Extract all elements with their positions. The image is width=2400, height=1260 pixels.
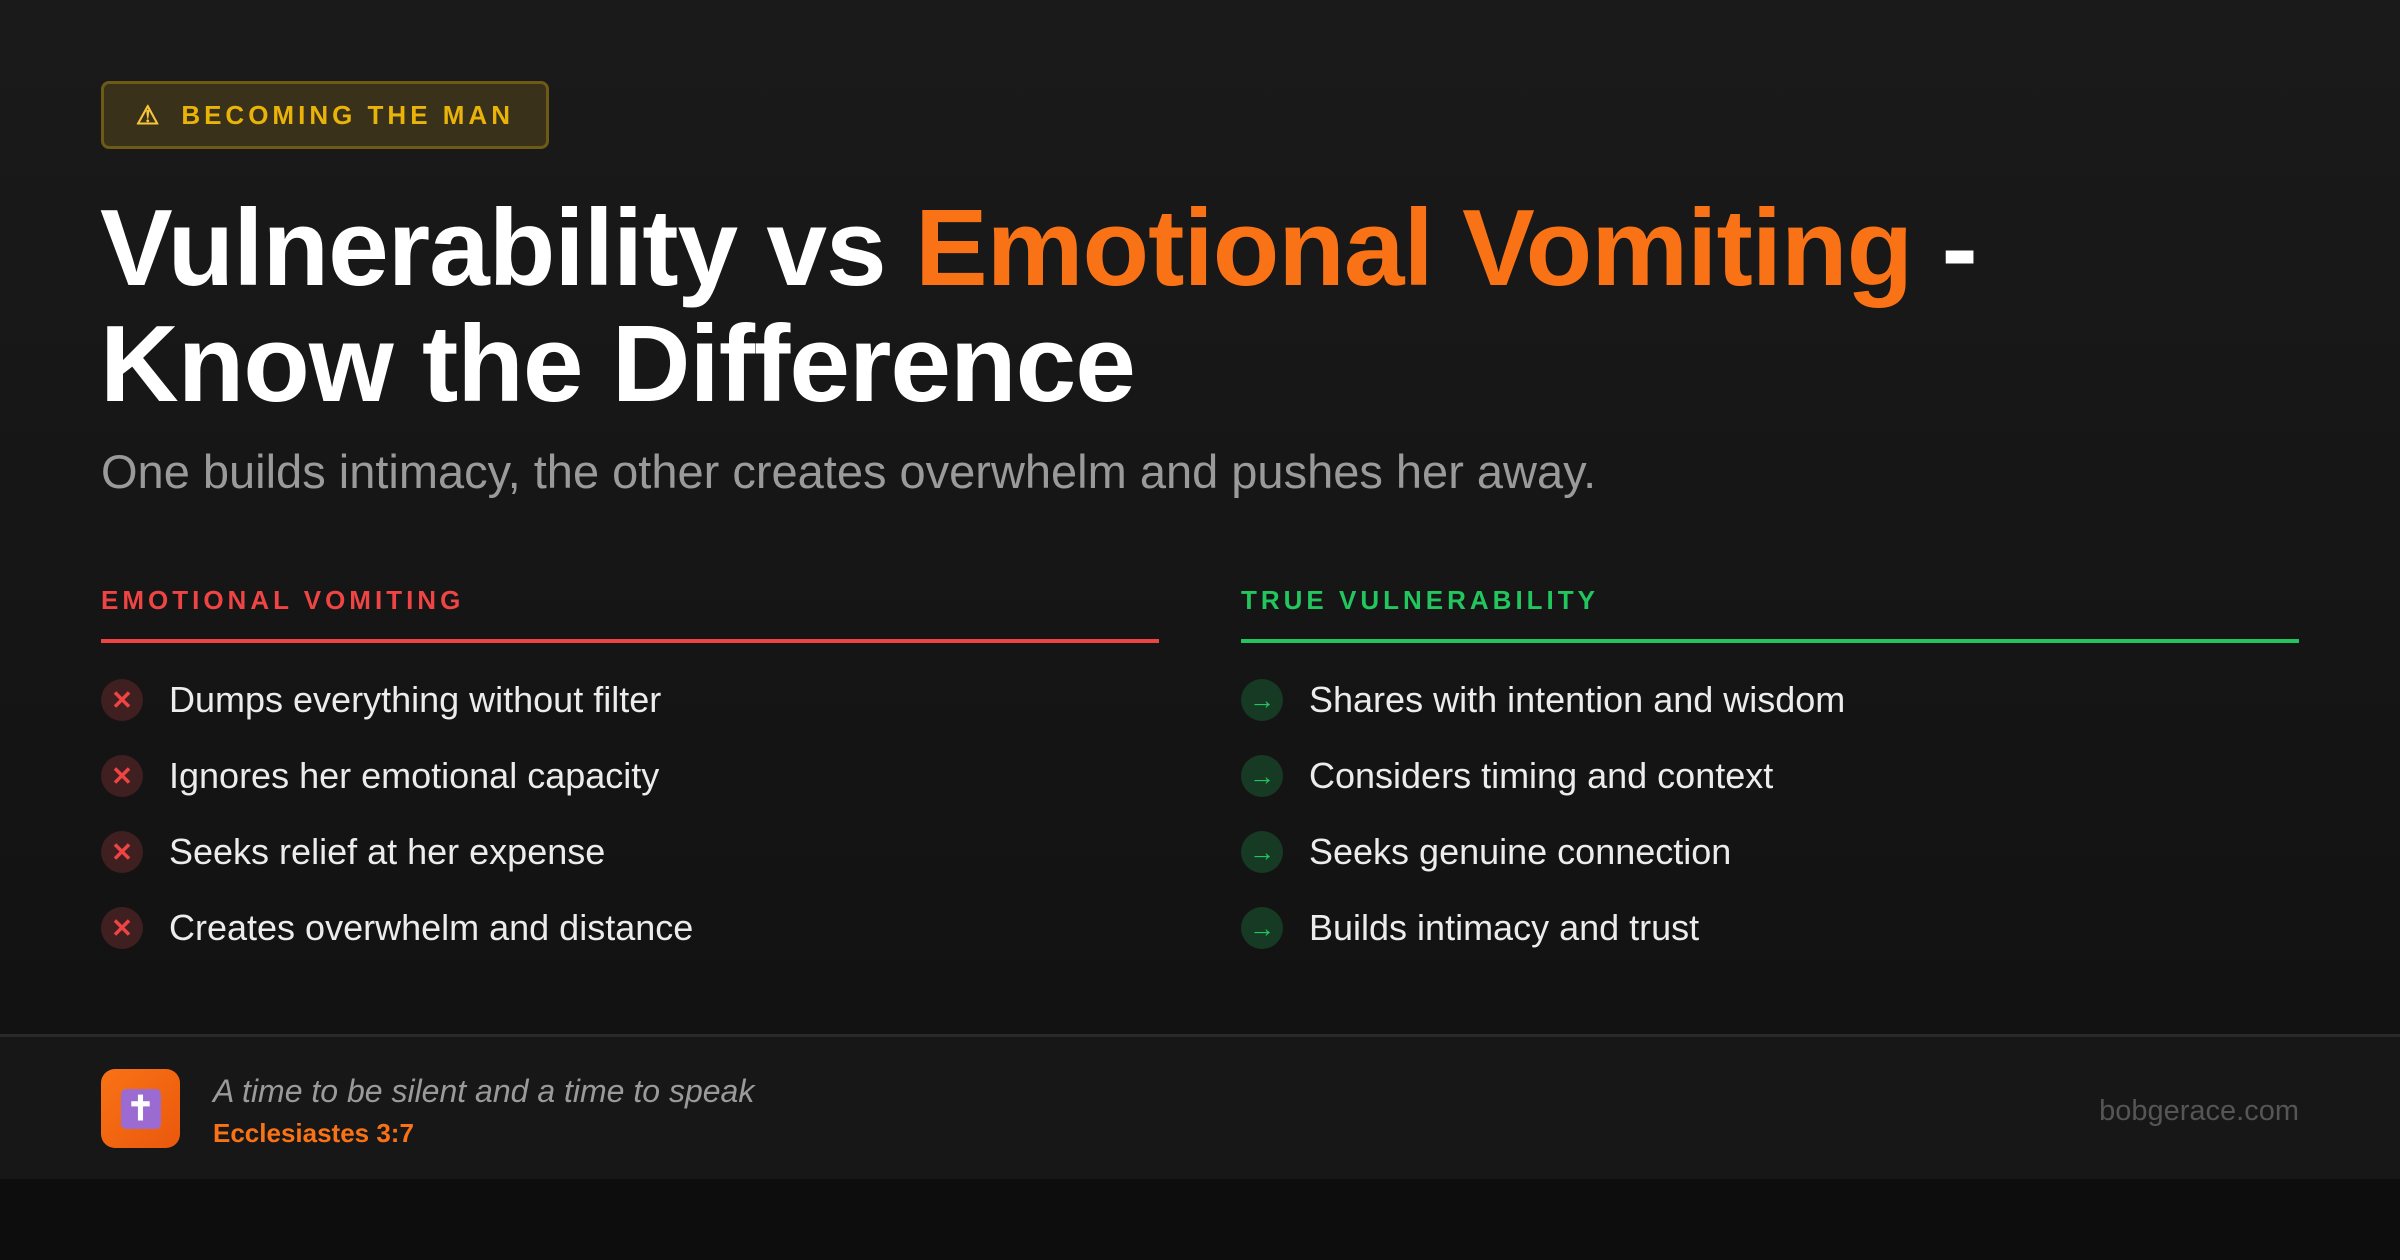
title: Know the Difference (100, 303, 1135, 425)
list: emotional vomiting items: ✕ (111, 761, 133, 791)
badge: becoming the man: ⚠ (136, 100, 163, 130)
icon: cross (101, 1069, 180, 1148)
list: emotional vomiting items: Seeks relief at her expense (169, 831, 605, 872)
header: true vulnerability: TRUE VULNERABILITY (1241, 585, 1599, 615)
list: emotional vomiting items: ✕ (111, 685, 133, 715)
badge: becoming the man: BECOMING THE MAN (181, 100, 514, 130)
quote: A time to be silent and a time to speak (213, 1073, 754, 1109)
reference: Ecclesiastes 3:7 (213, 1118, 414, 1148)
footer (0, 1034, 2400, 1179)
list: true vulnerability items: Builds intimacy and trust (1309, 907, 1699, 948)
list: true vulnerability items (1241, 679, 1845, 949)
list: true vulnerability items: → (1249, 837, 1275, 867)
website: bobgerace.com (2099, 1095, 2299, 1127)
list: emotional vomiting items: Creates overwhelm and distance (169, 907, 693, 948)
list: true vulnerability items: Seeks genuine connection (1309, 831, 1731, 872)
title (100, 187, 1977, 425)
panel: true vulnerability (1241, 585, 2299, 949)
list: emotional vomiting items: Dumps everything without filter (169, 679, 661, 720)
list: emotional vomiting items: ✕ (111, 913, 133, 943)
badge: becoming the man (101, 81, 549, 149)
list: emotional vomiting items (101, 679, 693, 949)
list: true vulnerability items: Shares with intention and wisdom (1309, 679, 1845, 720)
list: true vulnerability items: → (1249, 685, 1275, 715)
panel: emotional vomiting (101, 585, 1159, 949)
title: Vulnerability vs Emotional Vomiting - (100, 187, 1977, 309)
list: true vulnerability items: → (1249, 761, 1275, 791)
icon: cross: ✝ (126, 1090, 155, 1128)
list: emotional vomiting items: ✕ (111, 837, 133, 867)
header: emotional vomiting: EMOTIONAL VOMITING (101, 585, 464, 615)
list: true vulnerability items: → (1249, 913, 1275, 943)
subtitle: One builds intimacy, the other creates overwhelm and pushes her away. (101, 445, 1596, 498)
list: emotional vomiting items: Ignores her emotional capacity (169, 755, 659, 796)
list: true vulnerability items: Considers timing and context (1309, 755, 1773, 796)
